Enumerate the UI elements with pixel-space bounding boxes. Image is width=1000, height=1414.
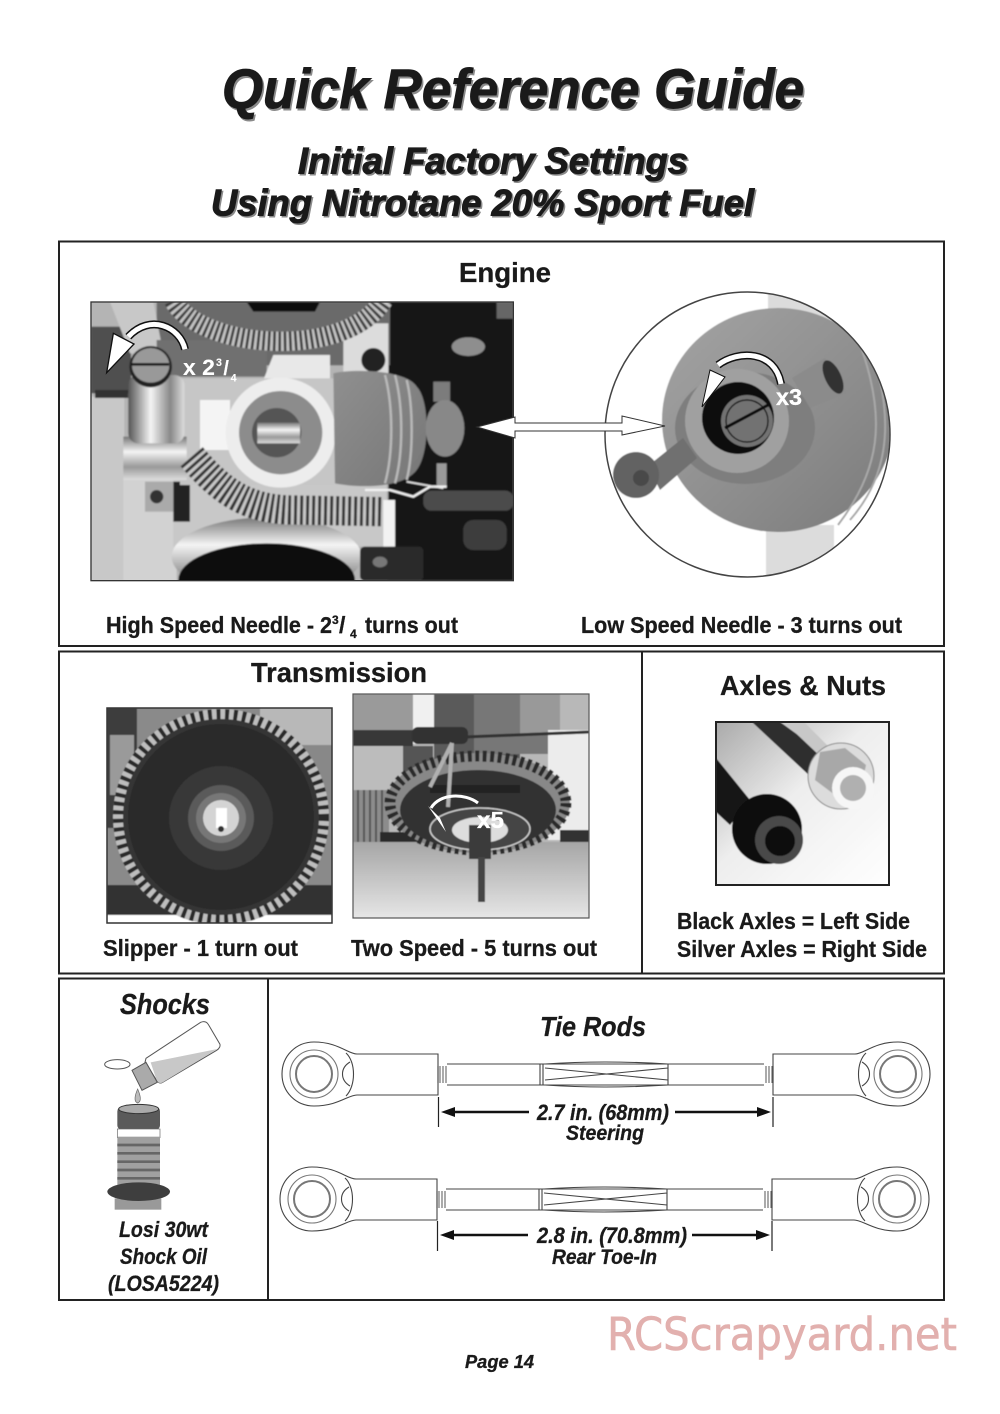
- dimension: steering: [438, 1097, 773, 1145]
- heading: transmission: Transmission: [251, 657, 427, 688]
- page number: Page 14: [465, 1352, 534, 1372]
- double arrow: [477, 416, 665, 438]
- caption: shock oil: [108, 1217, 219, 1296]
- caption: shock oil: (LOSA5224): [108, 1271, 219, 1296]
- caption: high speed needle: [106, 612, 458, 641]
- subtitle: Initial Factory Settings: [300, 142, 690, 183]
- dimension: rear toe-in: [438, 1221, 772, 1269]
- dimension: steering: Steering: [566, 1122, 644, 1145]
- dimension: steering: 2.7 in. (68mm): [536, 1100, 669, 1125]
- label: x3: x3: [776, 384, 802, 410]
- label: x5: x5: [477, 807, 504, 833]
- caption: shock oil: Losi 30wt: [119, 1217, 209, 1242]
- photo: slipper: [107, 708, 332, 925]
- subtitle: [211, 140, 756, 225]
- caption: high speed needle: /: [339, 612, 346, 638]
- drawing: steering tie rod: [282, 1042, 930, 1106]
- label: x 2 3/4: /: [223, 358, 229, 380]
- subtitle: Initial Factory Settings: [298, 140, 688, 182]
- subtitle: Using Nitrotane 20% Sport Fuel: [211, 182, 755, 224]
- caption: high speed needle: 4: [350, 627, 357, 641]
- label: x 2 3/4: 3: [216, 357, 222, 369]
- title: Quick Reference Guide: [224, 59, 806, 122]
- subtitle: Using Nitrotane 20% Sport Fuel: [212, 184, 756, 225]
- caption: shock oil: Shock Oil: [120, 1244, 208, 1269]
- caption: two speed: Two Speed - 5 turns out: [351, 935, 597, 961]
- heading: axles and nuts: Axles & Nuts: [720, 670, 886, 701]
- dimension: rear toe-in: 2.8 in. (70.8mm): [536, 1223, 687, 1248]
- caption: axle sides: Black Axles = Left Side: [677, 908, 910, 934]
- icon: turn arrow: [107, 324, 185, 373]
- panel: engine: [59, 242, 944, 646]
- caption: slipper: Slipper - 1 turn out: [103, 935, 298, 961]
- panel: transmission: [59, 652, 642, 974]
- heading: shocks: Shocks: [120, 989, 210, 1021]
- label: x 2 3/4: x 2: [183, 355, 215, 380]
- heading: engine: Engine: [459, 257, 551, 288]
- label: x 2 3/4: [183, 355, 237, 385]
- heading: tie rods: Tie Rods: [540, 1011, 646, 1042]
- caption: axle sides: Silver Axles = Right Side: [677, 936, 927, 962]
- caption: high speed needle: turns out: [365, 612, 458, 638]
- panel: tie rods: [268, 978, 944, 1300]
- photo: low speed needle: [600, 290, 895, 580]
- caption: low speed needle: Low Speed Needle - 3 turns out: [581, 612, 902, 638]
- caption: high speed needle: High Speed Needle - 2: [106, 612, 332, 638]
- icon: shock oil bottle and shock: [105, 1022, 220, 1210]
- photo: two speed: [353, 694, 589, 918]
- panel: axles and nuts: [642, 652, 944, 974]
- watermark: RCScrapyard.net: [607, 1308, 957, 1361]
- icon: turn arrow: [428, 796, 478, 832]
- icon: turn arrow: [702, 355, 781, 407]
- photo: high speed needle: [90, 301, 514, 582]
- drawing: rear toe-in tie rod: [280, 1167, 929, 1231]
- panel: shocks: [59, 978, 268, 1300]
- label: x 2 3/4: 4: [231, 373, 237, 385]
- photo: axles: [716, 722, 889, 885]
- caption: high speed needle: 3: [332, 613, 339, 627]
- title: Quick Reference Guide: [222, 57, 804, 120]
- dimension: rear toe-in: Rear Toe-In: [552, 1246, 657, 1269]
- caption: axle sides: [677, 908, 927, 962]
